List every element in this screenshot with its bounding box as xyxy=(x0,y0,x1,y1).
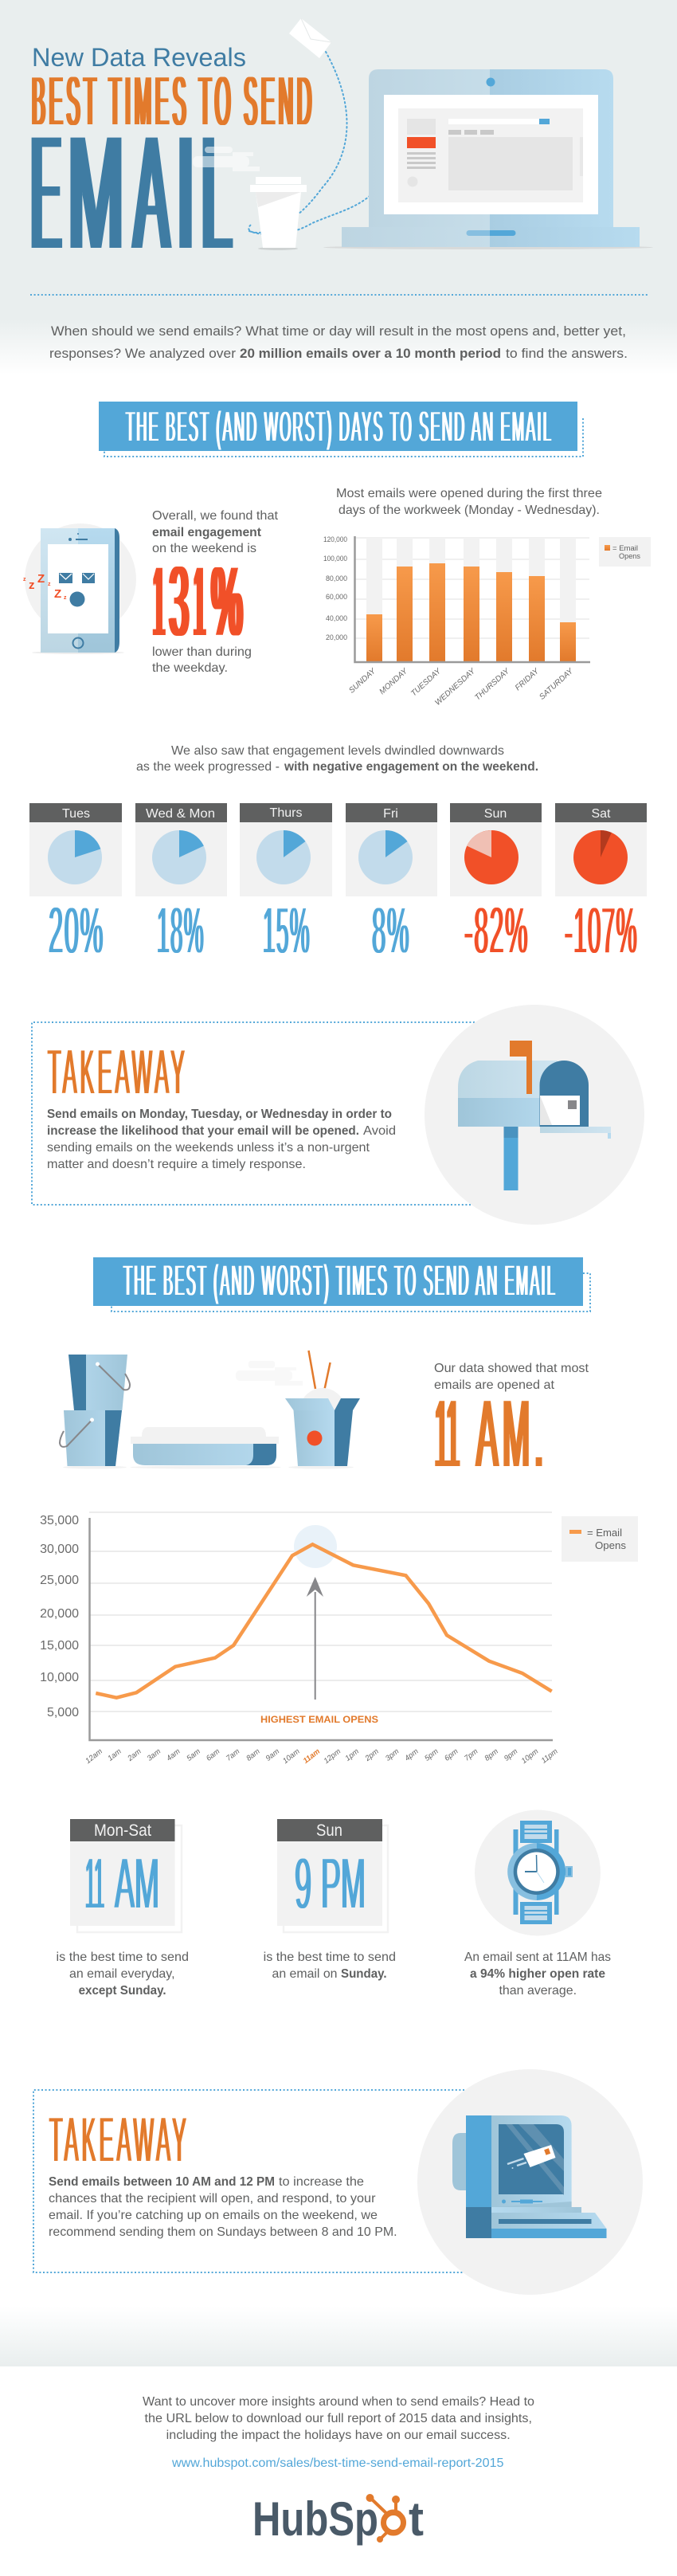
x axis labels: 4am xyxy=(165,1747,182,1763)
legend: line chart xyxy=(562,1516,638,1562)
text block: weekend engagement 131%: 3 xyxy=(170,547,189,657)
text block: engagement dwindled: as the week progressed - xyxy=(136,760,280,774)
takeaway text: Avoid xyxy=(363,1124,396,1138)
logo: HubSpot: t xyxy=(409,2492,424,2546)
text block: first three days: days of the workweek (Monday - Wednesday). xyxy=(338,504,600,517)
x axis labels: 5am xyxy=(186,1747,202,1763)
takeaway text xyxy=(47,1108,396,1171)
icon: laptop xyxy=(323,69,653,249)
icon: tray with lid xyxy=(130,1427,281,1469)
icon: wristwatch xyxy=(475,1810,601,1936)
text block: 11 AM: 11 xyxy=(435,1379,460,1488)
calendar text: Mon-Sat: is the best time to send xyxy=(56,1951,189,1964)
card: Thursday 15% xyxy=(240,803,332,967)
title: M xyxy=(68,100,123,284)
panel: takeaway days xyxy=(32,1022,475,1205)
text block: first three days: Most emails were opened during the first three xyxy=(336,487,602,500)
card: Friday 8%: Fri xyxy=(383,807,398,821)
title: E xyxy=(31,100,61,284)
intro text: 20 million emails over a 10 month period xyxy=(240,346,501,361)
bar chart: email opens by day xyxy=(323,535,590,708)
takeaway text: to increase the xyxy=(279,2175,364,2189)
card: Saturday -107% xyxy=(555,803,647,967)
logo: HubSpot: o xyxy=(381,2492,406,2546)
y axis labels: 10,000 xyxy=(40,1671,79,1684)
footer band xyxy=(0,2307,677,2366)
arrow: highest opens xyxy=(307,1577,323,1700)
takeaway text: sending emails on the weekends unless it’s a non-urgent xyxy=(47,1141,370,1155)
icon: food containers xyxy=(60,1351,360,1469)
intro text: When should we send emails? What time or day will result in the most opens and, better yet, xyxy=(51,323,626,339)
text block: weekend engagement 131%: 1 xyxy=(154,547,164,657)
calendar text: Sun xyxy=(264,1951,396,1981)
y axis labels: 20,000 xyxy=(40,1607,79,1621)
bar chart: email opens by day: SUNDAY xyxy=(347,666,378,696)
calendar text: Mon-Sat: except Sunday. xyxy=(79,1984,166,1998)
data line xyxy=(96,1544,552,1698)
takeaway text: matter and doesn’t require a timely response. xyxy=(47,1158,306,1171)
takeaway text: Send emails on Monday, Tuesday, or Wednesday in order to xyxy=(47,1108,392,1121)
title xyxy=(31,43,315,284)
calendar: Mon-Sat 11 AM: Mon-Sat xyxy=(94,1821,151,1840)
calendar: Sun 9 PM xyxy=(277,1819,388,1932)
y axis labels: 15,000 xyxy=(40,1639,79,1653)
highlight: peak xyxy=(294,1525,337,1568)
footer text: the URL below to download our full report of 2015 data and insights, xyxy=(145,2412,532,2425)
x axis labels: 10am xyxy=(281,1747,302,1766)
text block: weekend engagement 131% xyxy=(152,509,279,675)
bar chart: email opens by day: 100,000 xyxy=(323,555,347,563)
x axis labels: 2am xyxy=(126,1747,143,1763)
icon: mailbox xyxy=(425,1005,644,1225)
legend: bar chart: = Email xyxy=(612,544,638,552)
takeaway text xyxy=(49,2175,397,2239)
calendar: Mon-Sat 11 AM: AM xyxy=(115,1844,159,1924)
text block: first three days xyxy=(336,487,602,517)
x axis labels: 12am xyxy=(84,1747,104,1766)
calendar text: Sun: Sunday. xyxy=(341,1967,387,1981)
x axis labels: 7pm xyxy=(463,1747,479,1763)
text: 15% xyxy=(263,893,311,967)
card: Sunday -82%: Sun xyxy=(484,807,507,821)
footer text xyxy=(143,2395,534,2442)
card: Wednesday and Monday 18% xyxy=(135,803,227,967)
icon: sleeping phone: z xyxy=(23,577,26,582)
callout: highest email opens: HIGHEST EMAIL OPENS xyxy=(260,1714,378,1725)
text block: engagement dwindled xyxy=(136,744,538,774)
title: New Data Reveals xyxy=(32,43,246,72)
x axis labels: 7am xyxy=(225,1747,241,1763)
card: Tuesday 20%: Tues xyxy=(62,807,90,821)
panel: takeaway days: TAKEAWAY xyxy=(48,1037,188,1108)
y axis labels: 5,000 xyxy=(47,1706,79,1719)
watch text: An email sent at 11AM has xyxy=(464,1951,611,1964)
line chart: email opens by hour xyxy=(40,1512,560,1766)
x axis labels: 5pm xyxy=(423,1747,440,1763)
icon: flying envelope with dotted trail xyxy=(248,18,370,235)
x axis labels: 9pm xyxy=(503,1747,519,1763)
card: Saturday -107%: Sat xyxy=(591,807,611,821)
text block: engagement dwindled: We also saw that engagement levels dwindled downwards xyxy=(171,744,504,758)
bar chart: email opens by day: THURSDAY xyxy=(473,666,512,703)
bar chart: email opens by day: TUESDAY xyxy=(409,666,444,698)
bar chart: email opens by day: WEDNESDAY xyxy=(433,666,478,708)
card: Friday 8%: 8% xyxy=(372,893,410,967)
calendar: Sun 9 PM: Sun xyxy=(316,1821,342,1840)
panel: takeaway times xyxy=(33,2090,464,2272)
panel: takeaway times: TAKEAWAY xyxy=(49,2104,190,2176)
title: A xyxy=(134,100,169,284)
text block: weekend engagement 131%: % xyxy=(212,547,242,657)
x axis labels: 6pm xyxy=(443,1747,460,1763)
takeaway text: Send emails between 10 AM and 12 PM xyxy=(49,2175,275,2189)
text block: weekend engagement 131%: the weekday. xyxy=(152,661,228,675)
watch text xyxy=(464,1951,611,1998)
card: Thursday 15%: Thurs xyxy=(270,806,302,820)
bar chart: email opens by day: 80,000 xyxy=(326,574,347,582)
bar chart: email opens by day: 120,000 xyxy=(323,535,347,543)
watch text: than average. xyxy=(499,1984,577,1998)
takeaway text: email. If you’re catching up on emails on the weekend, we xyxy=(49,2209,378,2222)
takeaway text: recommend sending them on Sundays between 8 and 10 PM. xyxy=(49,2225,397,2239)
bar chart: email opens by day: 20,000 xyxy=(326,633,347,641)
y axis labels: 30,000 xyxy=(40,1543,79,1556)
report link: www.hubspot.com/sales/best-time-send-email-report-2015 xyxy=(171,2456,504,2470)
watch text: a 94% higher open rate xyxy=(470,1967,605,1981)
calendar text: Mon-Sat: an email everyday, xyxy=(69,1967,175,1981)
x axis labels: 4pm xyxy=(403,1747,421,1763)
icon: sleeping phone: Z xyxy=(37,572,45,586)
intro text: responses? We analyzed over xyxy=(49,346,236,361)
x axis labels: 1pm xyxy=(344,1747,361,1763)
x axis labels: 3am xyxy=(146,1747,162,1763)
header background xyxy=(0,0,677,374)
text block: 11 AM: emails are opened at xyxy=(434,1378,555,1392)
intro text xyxy=(49,323,628,361)
legend: line chart: Opens xyxy=(595,1539,626,1551)
calendar text: Sun: is the best time to send xyxy=(264,1951,396,1964)
text: -82% xyxy=(464,893,529,967)
calendar text: Sun: an email on xyxy=(272,1967,338,1981)
logo: HubSpot: HubSp xyxy=(252,2492,378,2546)
card: Tuesday 20% xyxy=(29,803,122,967)
y axis labels xyxy=(40,1514,79,1719)
text block: 11 AM: Our data showed that most xyxy=(434,1362,589,1375)
x axis labels: 12pm xyxy=(323,1747,342,1766)
legend: bar chart: Opens xyxy=(619,552,640,560)
card: Tuesday 20%: 20% xyxy=(49,893,104,967)
text block: engagement dwindled: with negative engagement on the weekend. xyxy=(284,760,538,774)
x axis labels: 11am xyxy=(302,1747,322,1766)
text block: 11 AM xyxy=(434,1362,589,1488)
text block: weekend engagement 131%: Overall, we found that xyxy=(152,509,279,523)
x axis labels: 8am xyxy=(245,1747,262,1763)
title: I xyxy=(177,100,194,284)
icon: desktop computer xyxy=(417,2069,643,2295)
bar chart: email opens by day: 60,000 xyxy=(326,593,347,601)
bar chart: email opens by day: SATURDAY xyxy=(538,666,576,702)
x axis labels: 2pm xyxy=(363,1747,381,1763)
x axis labels: 3pm xyxy=(384,1747,401,1763)
card: Sunday -82% xyxy=(450,803,542,967)
card: Wednesday and Monday 18%: Wed & Mon xyxy=(146,807,215,821)
icon: sleeping phone xyxy=(23,523,136,654)
calendar: Mon-Sat 11 AM: 11 xyxy=(85,1844,104,1924)
takeaway text: chances that the recipient will open, and respond, to your xyxy=(49,2192,376,2205)
footer text: including the impact the holidays have on our email success. xyxy=(166,2429,511,2442)
calendar: Sun 9 PM: PM xyxy=(321,1844,366,1924)
x axis labels: 11pm xyxy=(540,1747,560,1766)
text block: weekend engagement 131%: on the weekend is xyxy=(152,542,256,555)
icon: stacked buckets xyxy=(60,1355,130,1469)
x axis labels: 9am xyxy=(264,1747,281,1763)
card: Friday 8% xyxy=(346,803,437,967)
calendar text: Mon-Sat xyxy=(56,1951,189,1998)
x axis labels xyxy=(84,1747,560,1766)
calendar: Sun 9 PM: 9 xyxy=(295,1844,311,1924)
takeaway text: increase the likelihood that your email will be opened. xyxy=(47,1124,359,1138)
icon: noodle box with steam xyxy=(236,1351,360,1469)
x axis labels: 1am xyxy=(106,1747,123,1763)
legend: line chart: = Email xyxy=(587,1527,622,1539)
text block: weekend engagement 131%: email engagement xyxy=(152,526,262,539)
icon: sleeping phone: z xyxy=(29,578,35,592)
x axis labels: 8pm xyxy=(483,1747,500,1763)
calendar: Mon-Sat 11 AM xyxy=(70,1819,182,1932)
y axis labels: 35,000 xyxy=(40,1514,79,1527)
x axis labels: 6am xyxy=(205,1747,221,1763)
divider: dotted line xyxy=(30,294,649,296)
icon: coffee cup with steam xyxy=(193,147,307,250)
title: L xyxy=(202,100,232,284)
icon: sleeping phone: Z xyxy=(54,587,61,601)
text: 18% xyxy=(157,893,205,967)
icon: sleeping phone: z xyxy=(64,595,67,601)
legend: bar chart xyxy=(599,537,651,567)
bar chart: email opens by day: MONDAY xyxy=(378,666,410,696)
text block: weekend engagement 131%: 1 xyxy=(194,547,205,657)
intro text: to find the answers. xyxy=(506,346,628,361)
icon: sleeping phone: z xyxy=(48,582,51,587)
x axis labels: 10pm xyxy=(520,1747,540,1766)
text block: weekend engagement 131%: lower than during xyxy=(152,645,252,659)
y axis labels: 25,000 xyxy=(40,1574,79,1587)
bar chart: email opens by day: FRIDAY xyxy=(514,666,542,692)
footer text: Want to uncover more insights around when to send emails? Head to xyxy=(143,2395,534,2409)
bar chart: email opens by day: 40,000 xyxy=(326,614,347,622)
